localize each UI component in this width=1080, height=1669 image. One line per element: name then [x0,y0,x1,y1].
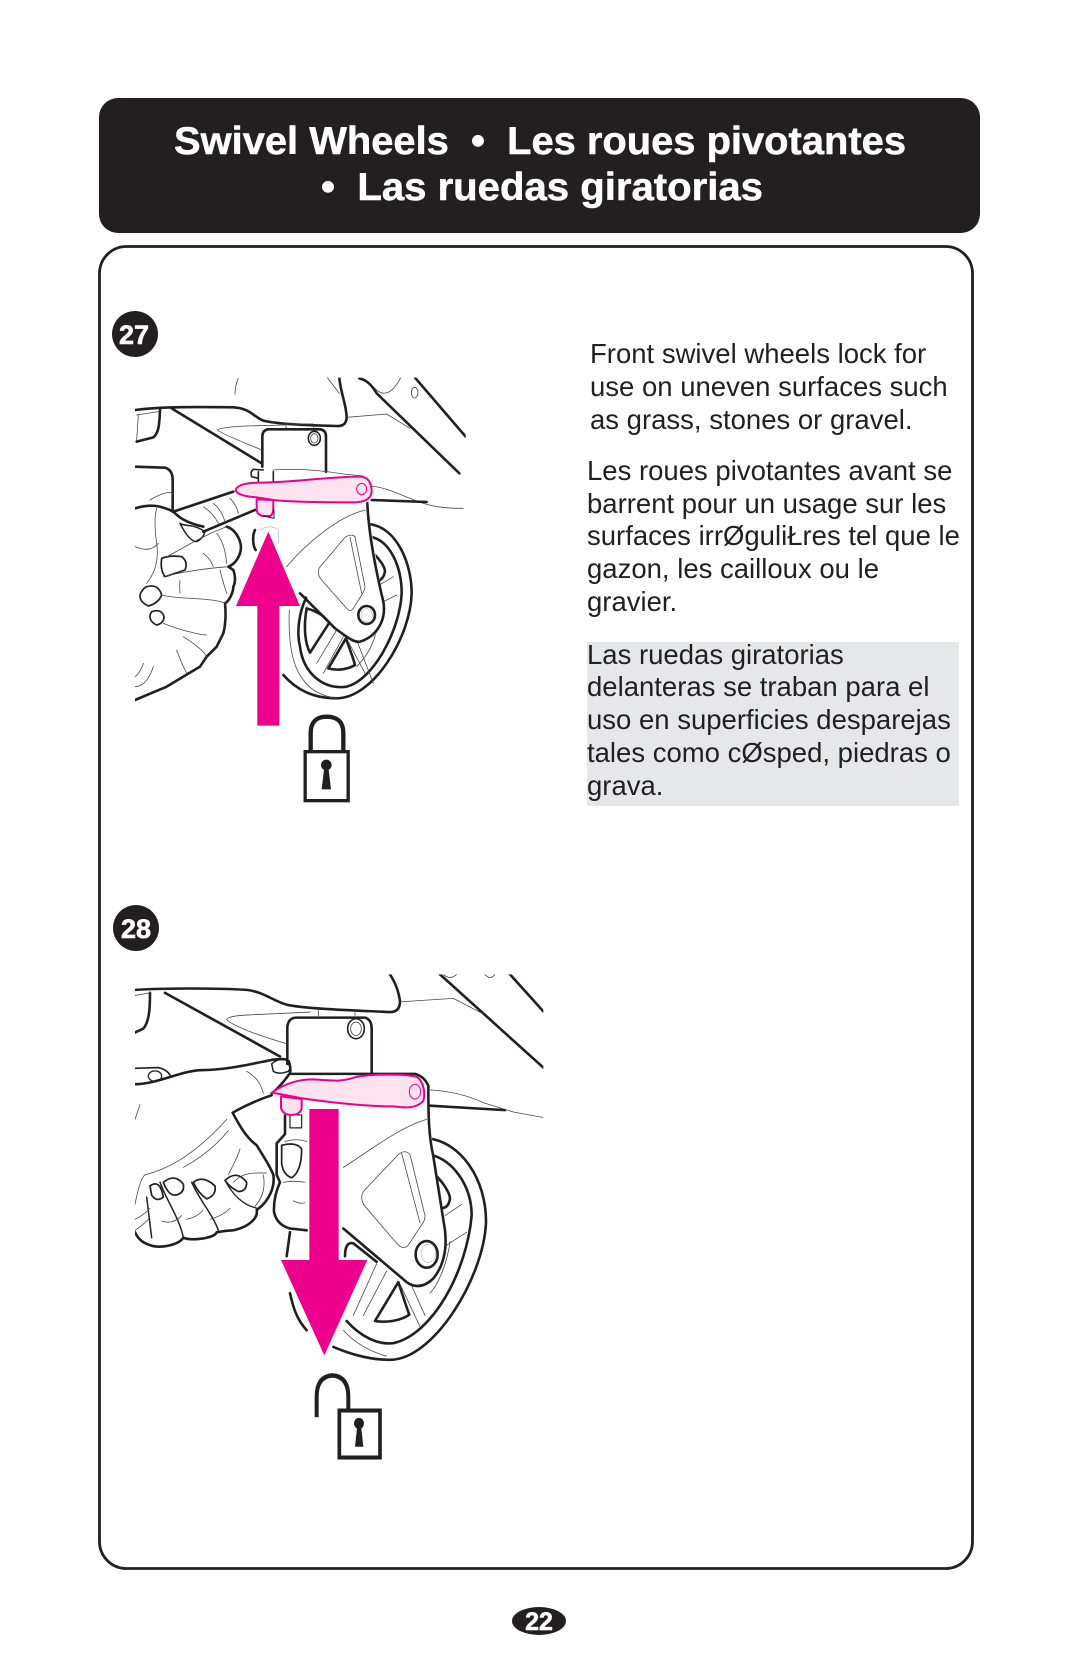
wheel [290,1139,486,1360]
text block: French: barrent pour un usage sur les [587,488,946,519]
step badge 27 [112,311,158,357]
catch below lever [253,527,278,550]
title line 1: Swivel Wheels • Les roues pivotantes [174,120,906,163]
step badge 28 [113,905,159,951]
step badge 28: 28 [121,914,151,944]
heading banner [99,98,980,233]
illustration: unlocking the swivel wheel [135,974,543,1458]
panel: instructions frame [100,246,972,1568]
text block: Spanish on gray [587,639,959,806]
text block: English: as grass, stones or gravel. [590,404,913,435]
arrow down [281,1109,367,1355]
text block: French: surfaces irrØguliŁres tel que le [587,520,960,551]
text block: Spanish on gray: uso en superficies desparejas [587,704,951,735]
text block: French: gravier. [587,586,677,617]
wheel [283,524,412,698]
icon: open padlock [317,1375,380,1458]
text block: Spanish on gray: delanteras se traban para el [587,671,929,702]
page number: 22 [525,1608,553,1636]
title line 2: • Las ruedas giratorias [321,166,763,209]
text block: French: Les roues pivotantes avant se [587,455,952,486]
illustration: locking the swivel wheel [135,378,466,801]
text block: French [587,455,960,617]
wheel fork [342,1085,447,1288]
lever highlight [236,477,372,518]
wheel fork [273,503,384,642]
lever highlight [272,1074,428,1115]
hand [135,492,255,700]
stroller frame [135,974,543,1118]
text block: French: gazon, les cailloux ou le [587,553,879,584]
page number [512,1607,566,1636]
text block: English: use on uneven surfaces such [590,371,948,402]
text block: Spanish on gray: Las ruedas giratorias [587,639,844,670]
stroller frame [135,378,466,512]
text block: English: Front swivel wheels lock for [590,338,926,369]
icon: locked padlock [305,717,348,801]
hand [135,1059,307,1256]
text block: Spanish on gray: tales como cØsped, piedras o [587,737,951,768]
text block: English [590,338,948,435]
text block: Spanish on gray: grava. [587,770,663,801]
step badge 27: 27 [119,320,149,350]
arrow up [236,532,300,726]
